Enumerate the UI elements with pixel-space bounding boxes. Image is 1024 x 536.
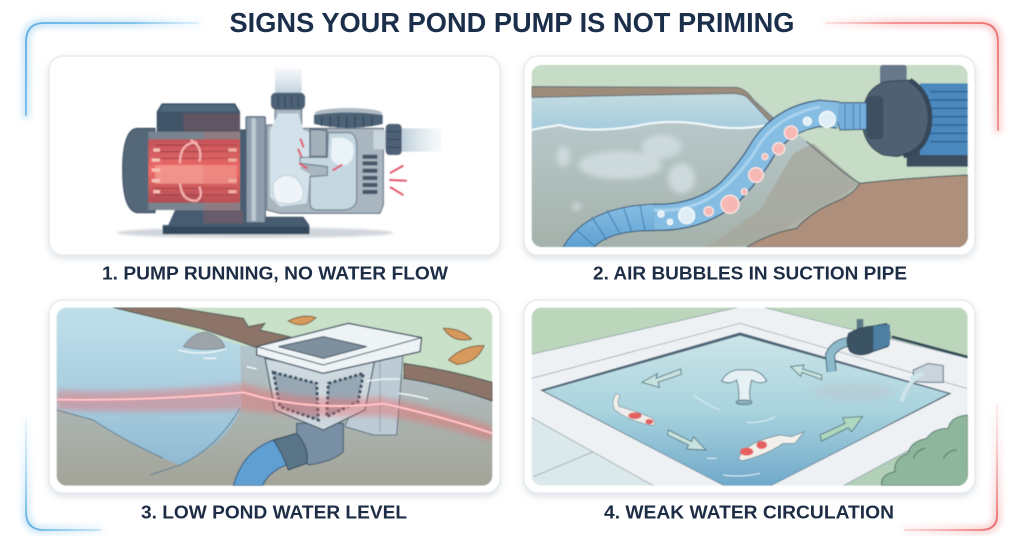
deck lines bbox=[532, 308, 968, 486]
illustration: pond and hose bbox=[532, 65, 970, 250]
panel 3: low pond water level bbox=[49, 300, 500, 493]
label 4: 4. WEAK WATER CIRCULATION bbox=[604, 502, 894, 522]
pipe collar right bbox=[373, 124, 402, 155]
illustration: pump bbox=[117, 68, 442, 238]
clear hose with bubbles bbox=[654, 107, 838, 225]
card 2 bbox=[524, 56, 975, 255]
highlight line bbox=[57, 392, 492, 433]
pool water bbox=[544, 336, 948, 486]
red water level line bbox=[57, 392, 492, 433]
illustration: skimmer bbox=[57, 308, 492, 486]
pond water bbox=[531, 94, 812, 248]
panel 1: pump running, no water flow bbox=[49, 56, 500, 255]
grass top left bbox=[532, 308, 737, 354]
motor end cap bbox=[123, 128, 155, 213]
red water level band bbox=[57, 383, 492, 442]
pump bbox=[847, 319, 968, 357]
ground shadow bbox=[117, 227, 393, 238]
shrub bbox=[881, 415, 968, 486]
glowing motor body bbox=[148, 132, 243, 223]
label 3: 3. LOW POND WATER LEVEL bbox=[141, 502, 407, 522]
flow arrows bbox=[642, 365, 863, 450]
soil bbox=[747, 175, 968, 247]
grass lower right with shrub bbox=[844, 450, 909, 486]
strainer lid bbox=[314, 108, 383, 128]
outlet pipe bbox=[233, 433, 307, 486]
decorative frame: blue bottom-left corner bbox=[26, 420, 100, 530]
outlet box bbox=[902, 363, 943, 402]
vent slots bbox=[363, 157, 377, 192]
pond water bbox=[57, 308, 242, 465]
shoreline bbox=[57, 408, 240, 475]
skimmer box bbox=[257, 323, 422, 465]
card 1 bbox=[49, 56, 500, 255]
label 2: 2. AIR BUBBLES IN SUCTION PIPE bbox=[593, 264, 907, 284]
hose corrugated ends bbox=[562, 103, 867, 250]
title: SIGNS YOUR POND PUMP IS NOT PRIMING bbox=[230, 7, 794, 38]
deck bbox=[532, 308, 968, 486]
leaves bbox=[288, 316, 484, 364]
grass lower left bbox=[532, 418, 653, 486]
illustration: pool bbox=[532, 308, 968, 486]
slope bbox=[707, 143, 860, 247]
ripples bbox=[693, 395, 775, 476]
murky clouds bbox=[557, 135, 695, 211]
pool coping bbox=[540, 332, 952, 486]
decorative frame: red top-right corner bbox=[826, 23, 998, 130]
panel 4: weak water circulation bbox=[524, 300, 975, 493]
motor base bbox=[163, 210, 309, 234]
bank top bbox=[532, 87, 777, 123]
right bank bbox=[404, 363, 492, 401]
label 1: 1. PUMP RUNNING, NO WATER FLOW bbox=[102, 264, 448, 284]
fountain bbox=[722, 370, 767, 405]
card 3 bbox=[49, 300, 500, 493]
pump housing bbox=[267, 109, 383, 213]
pump hose bbox=[830, 342, 850, 372]
motor top box bbox=[157, 103, 240, 133]
grass bbox=[140, 307, 493, 382]
ripples bbox=[247, 367, 428, 399]
grass top right bbox=[765, 308, 968, 358]
pump bbox=[862, 65, 970, 167]
koi 1 bbox=[613, 393, 655, 426]
splash area bbox=[813, 382, 893, 401]
pipe collar top bbox=[271, 93, 305, 109]
grass edge line bbox=[807, 142, 968, 183]
outlet pipe top bbox=[275, 68, 302, 95]
outlet pipe right bbox=[400, 128, 442, 152]
shrub shading bbox=[913, 448, 957, 458]
upper clear water bbox=[532, 95, 773, 130]
rock bbox=[178, 332, 227, 358]
koi 2 bbox=[738, 432, 804, 461]
red warning dashes bbox=[298, 139, 406, 195]
panel 2: air bubbles in suction pipe bbox=[524, 56, 975, 255]
decorative frame: blue top-left corner bbox=[26, 23, 198, 115]
flange bbox=[240, 117, 265, 223]
left bank bbox=[113, 308, 290, 348]
exposed ground bbox=[57, 345, 492, 486]
decorative frame: red bottom-right corner bbox=[905, 405, 997, 530]
grass bbox=[532, 65, 968, 247]
card 4 bbox=[524, 300, 975, 493]
water surface line bbox=[532, 122, 773, 130]
